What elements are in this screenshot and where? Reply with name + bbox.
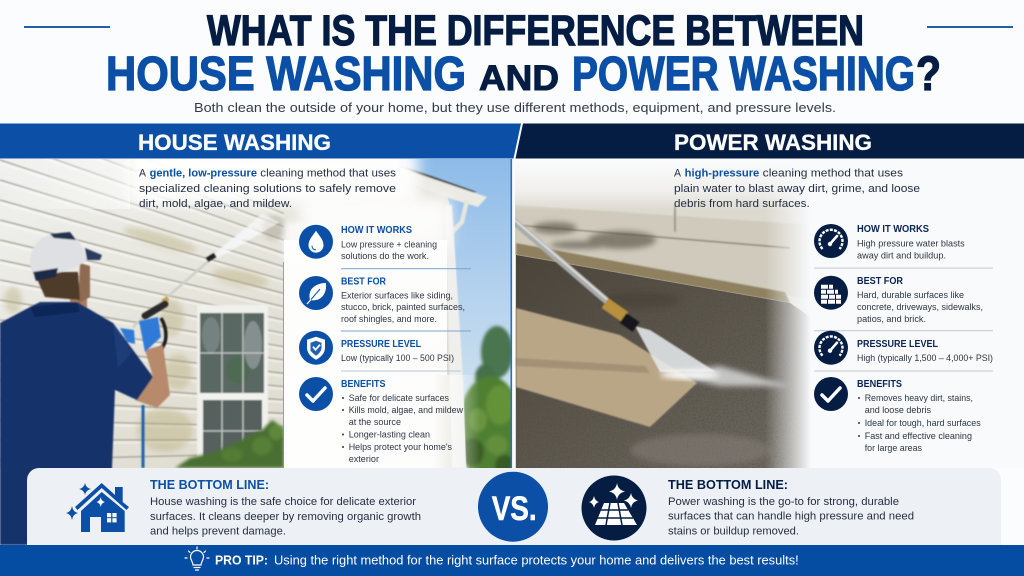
pressure level: house: PRESSURE LEVEL [341,339,422,350]
panel: house washing details [299,225,471,465]
title: WHAT IS THE DIFFERENCE BETWEEN [207,7,864,55]
intro text: house washing: specialized cleaning solutions to safely remove [139,183,396,195]
shrub [175,420,284,468]
pro tip bar: PRO TIP: [215,554,268,568]
title accent line right [927,26,1013,28]
title: ? [916,48,941,101]
benefits: power: for large areas [865,443,922,454]
bottom line text: power washing [668,478,914,538]
VS badge: VS. [492,490,537,528]
panel: power washing details [814,224,993,454]
bottom line text: power washing: stains or buildup removed. [668,526,799,538]
bottom line text: house washing: THE BOTTOM LINE: [150,478,269,492]
benefits: house: Helps protect your home's [349,442,452,453]
bottom line text: house washing [150,478,421,538]
roof and gutter [398,165,487,468]
benefits: power: Ideal for tough, hard surfaces [865,418,981,429]
how it works: house [299,225,437,262]
intro text: house washing: A [139,168,147,180]
icon: check badge [814,377,848,411]
best for: house: Exterior surfaces like siding, [341,290,453,302]
best for: power: patios, and brick. [857,314,926,325]
wall and ledge [515,205,815,303]
divider edge [283,262,284,468]
VS badge [478,472,548,542]
intro text: house washing: cleaning method that uses [260,168,397,180]
icon: brick wall [814,276,848,310]
best for: power [814,276,983,325]
title accent line left [24,26,110,28]
benefits: house: Kills mold, algae, and mildew [349,405,463,416]
how it works: house: solutions do the work. [341,251,429,262]
bottom line text: house washing: surfaces. It cleans deeper by removing organic growth [150,511,421,523]
photo edge line [510,159,512,468]
intro text: power washing: cleaning method that uses [763,168,904,180]
panel: bottom line [27,468,1001,545]
icon: pressure gauge [814,331,848,365]
intro text: power washing: plain water to blast away dirt, grime, and loose [674,183,920,195]
icon: light bulb [185,547,209,570]
benefits: house: at the source [349,417,401,428]
best for: power: concrete, driveways, sidewalks, [857,302,983,313]
best for: house: BEST FOR [341,276,386,288]
icon: clean tiles [582,476,646,540]
bottom line text: house washing: House washing is the safe choice for delicate exterior [150,496,416,508]
icon: shield [299,331,333,365]
tree behind [464,324,510,468]
best for: house: roof shingles, and more. [341,314,437,325]
photo: power washing [515,175,810,468]
intro text: power washing: debris from hard surfaces. [674,198,810,210]
how it works: power: away dirt and buildup. [857,251,946,262]
icon: leaf [299,276,333,310]
siding lines [0,159,284,460]
best for: power: BEST FOR [857,276,903,287]
spray [214,214,280,258]
panel wash lower [284,375,480,468]
worker [0,232,170,545]
how it works: house: HOW IT WORKS [341,225,412,236]
benefits: house: Longer-lasting clean [349,430,430,441]
pressure level: house: Low (typically 100 – 500 PSI) [341,353,454,364]
fade right [767,178,811,468]
grime stains [4,216,286,452]
clean concrete patch [516,308,697,427]
title: AND [479,59,559,98]
icon: sparkling house [66,483,129,532]
pressure level: power: PRESSURE LEVEL [857,339,939,350]
how it works: power: HOW IT WORKS [857,224,929,235]
benefits: power: and loose debris [865,405,931,416]
how it works: power: High pressure water blasts [857,239,965,250]
subtitle: Both clean the outside of your home, but they use different methods, equipment, and pressure levels. [194,100,836,115]
icon: gauge [814,224,848,258]
pressure wand [510,216,636,327]
intro text: power washing [674,168,920,210]
photo: house washing [0,159,512,545]
title: POWER WASHING [572,48,915,101]
benefits: power: Fast and effective cleaning [865,431,972,442]
intro text: power washing: high-pressure [685,168,759,180]
pro tip bar [0,545,1024,576]
benefits: house: Safe for delicate surfaces [349,393,449,404]
best for: power: Hard, durable surfaces like [857,290,964,301]
bottom line text: power washing: Power washing is the go-to for strong, durable [668,496,899,508]
intro text: house washing: dirt, mold, algae, and mildew. [139,198,292,210]
best for: house [299,276,465,325]
pressure level: power: High (typically 1,500 – 4,000+ PSI) [857,353,993,364]
benefits: house: BENEFITS [341,379,386,390]
fade top [515,159,815,211]
header band: power washing [516,124,1024,158]
how it works: house: Low pressure + cleaning [341,239,437,250]
best for: house: stucco, brick, painted surfaces, [341,302,465,313]
icon: check mark [299,377,333,411]
ground speckle [537,258,784,468]
house wall [0,159,466,468]
water spray [635,326,790,386]
bottom line text: power washing: THE BOTTOM LINE: [668,478,788,492]
header band: power washing: POWER WASHING [674,130,872,155]
header band: house washing: HOUSE WASHING [138,130,331,155]
benefits: power [814,377,981,454]
wand [133,255,215,468]
top fade [128,148,418,204]
how it works: power [814,224,965,262]
benefits: power: BENEFITS [857,379,902,390]
intro text: power washing: A [674,168,682,180]
pressure level: house [299,331,454,365]
icon: water drop [299,225,333,259]
benefits: house: exterior [349,454,380,465]
bottom line text: house washing: and helps prevent damage. [150,526,286,538]
header band: house washing [0,124,521,158]
intro text: house washing [139,168,397,210]
bottom line text: power washing: surfaces that can handle high pressure and need [668,510,914,522]
benefits: house [299,377,463,465]
ground [516,255,815,468]
benefits: power: Removes heavy dirt, stains, [865,393,973,404]
title: HOUSE WASHING [106,48,466,101]
window [197,305,268,460]
intro text: house washing: gentle, low-pressure [150,168,257,180]
pressure level: power [814,331,993,365]
panel wash [300,198,450,248]
title [106,7,941,101]
pro tip bar: Using the right method for the right surface protects your home and delivers the best results! [274,554,799,568]
